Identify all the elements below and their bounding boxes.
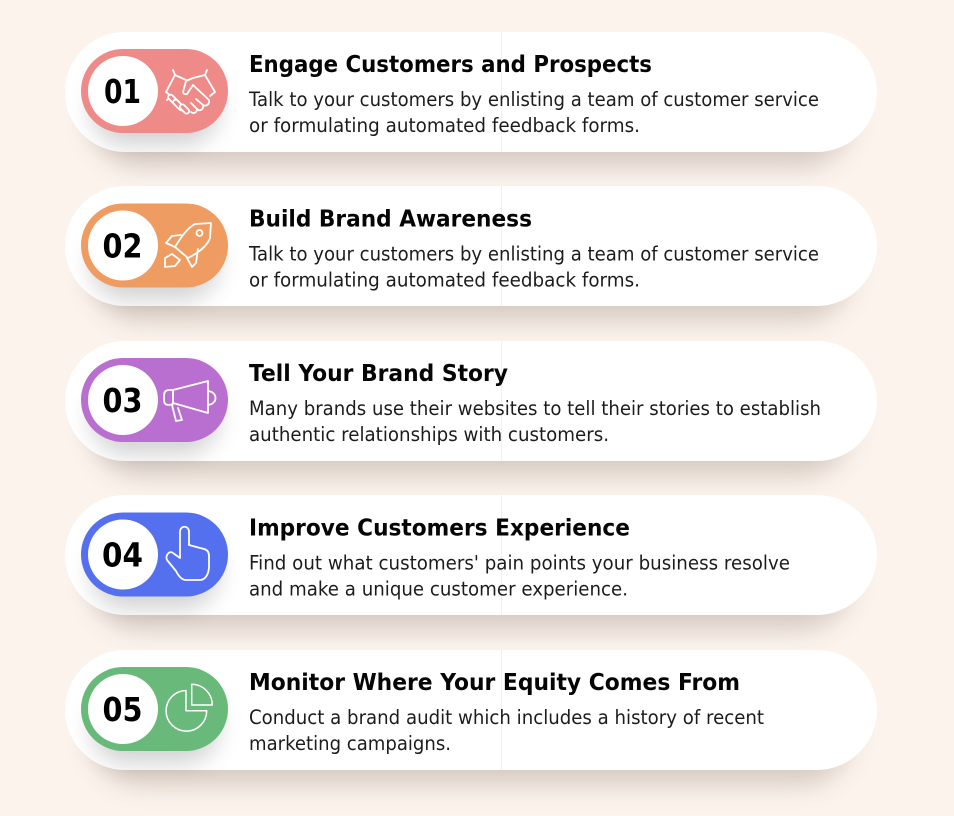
description: or formulating automated feedback forms. xyxy=(249,114,640,137)
description: Find out what customers' pain points your business resolve xyxy=(249,552,790,574)
card 1: Engage Customers and Prospects xyxy=(65,32,877,166)
card 2: Build Brand Awareness xyxy=(65,186,877,320)
badge 05: 05 xyxy=(102,690,142,729)
heading: Tell Your Brand Story xyxy=(249,359,508,387)
badge 03: 03 xyxy=(102,381,142,420)
description: marketing campaigns. xyxy=(249,732,451,755)
description xyxy=(249,706,764,755)
description: Talk to your customers by enlisting a team of customer service xyxy=(248,242,819,266)
description: Conduct a brand audit which includes a history of recent xyxy=(249,706,764,729)
badge 03 xyxy=(81,358,228,455)
badge 04: 04 xyxy=(102,536,143,574)
heading: Engage Customers and Prospects xyxy=(249,50,652,78)
heading: Improve Customers Experience xyxy=(249,514,630,542)
description xyxy=(248,88,819,137)
badge 02: 02 xyxy=(102,226,142,266)
badge 01: 01 xyxy=(104,72,141,111)
description xyxy=(249,552,790,600)
icon: handshake xyxy=(166,70,215,115)
description: Talk to your customers by enlisting a team of customer service xyxy=(248,88,819,111)
badge 01 xyxy=(81,49,228,146)
description xyxy=(249,397,821,446)
description: or formulating automated feedback forms. xyxy=(249,268,640,292)
description: and make a unique customer experience. xyxy=(249,578,628,600)
icon: megaphone xyxy=(164,381,216,421)
card 3: Tell Your Brand Story xyxy=(65,341,877,475)
heading: Build Brand Awareness xyxy=(249,204,532,232)
description xyxy=(248,242,819,292)
icon: pointing hand xyxy=(166,527,209,580)
card 4: Improve Customers Experience xyxy=(65,495,877,629)
badge 05 xyxy=(81,667,228,764)
description: Many brands use their websites to tell their stories to establish xyxy=(249,397,821,420)
heading: Monitor Where Your Equity Comes From xyxy=(249,668,740,696)
description: authentic relationships with customers. xyxy=(249,423,609,446)
card 5: Monitor Where Your Equity Comes From xyxy=(65,650,877,784)
icon: rocket xyxy=(165,223,211,267)
badge 04 xyxy=(81,512,228,610)
badge 02 xyxy=(81,204,228,300)
icon: pie chart xyxy=(166,684,212,731)
